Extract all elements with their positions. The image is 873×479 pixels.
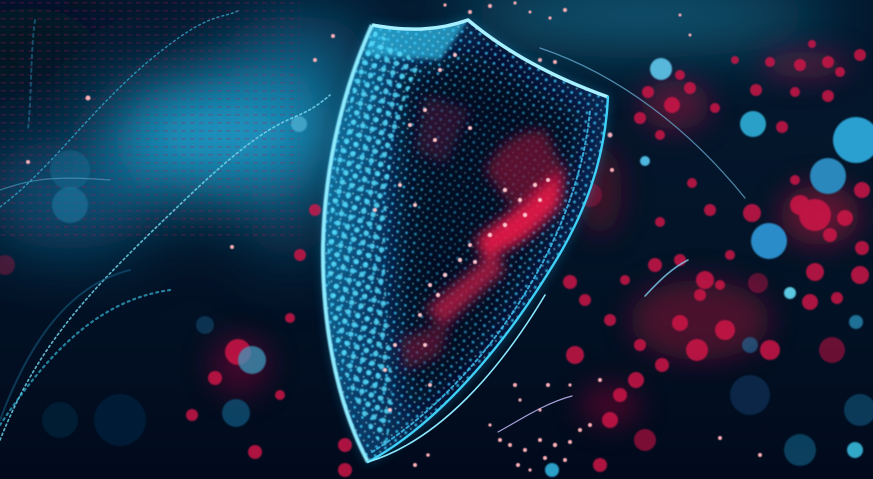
shield: dark inner bbox=[395, 50, 585, 420]
shield: dot mesh bbox=[324, 22, 607, 460]
shield: mesh dimming in centre bbox=[410, 70, 570, 400]
shield: red glow streak bbox=[400, 95, 565, 370]
shield: pink particles bbox=[373, 53, 550, 412]
shield: top light panel bbox=[365, 20, 468, 60]
background glow: blue haze bbox=[0, 0, 830, 260]
shield: bottom right edges bbox=[368, 97, 608, 462]
shield: bright rim bbox=[372, 20, 608, 97]
light streaks bbox=[0, 10, 745, 440]
shield: body bbox=[324, 22, 607, 460]
background: red bokeh haze bbox=[210, 51, 860, 425]
code grid pattern top left bbox=[0, 0, 300, 240]
shield: left edge bbox=[323, 25, 372, 462]
shield: left bright dot band bbox=[328, 30, 420, 450]
shield bbox=[310, 10, 620, 470]
shield: outer glow bbox=[323, 20, 608, 462]
